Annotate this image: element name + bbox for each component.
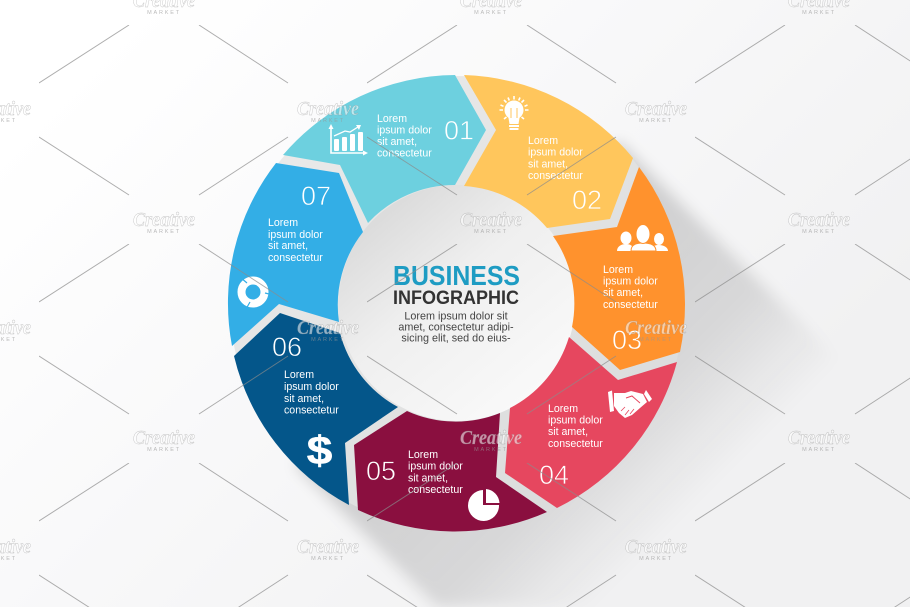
segment 02: Lorem xyxy=(528,135,558,147)
watermarks: Creative xyxy=(460,427,522,449)
watermarks: MARKET xyxy=(147,447,181,453)
segment 04: sit amet, xyxy=(548,426,588,438)
segment 01: 01 xyxy=(444,116,474,146)
segment 02: sit amet, xyxy=(528,158,568,170)
watermarks: MARKET xyxy=(147,229,181,235)
watermarks: MARKET xyxy=(474,229,508,235)
segment 02: 02 xyxy=(572,185,602,215)
icon: bar chart xyxy=(328,124,368,156)
watermarks: Creative xyxy=(297,536,359,558)
center description: sicing elit, sed do eius- xyxy=(401,332,511,344)
center description: amet, consectetur adipi- xyxy=(398,322,514,334)
watermarks: Creative xyxy=(788,427,850,449)
segment 01: ipsum dolor xyxy=(377,124,432,136)
watermarks: Creative xyxy=(297,317,359,339)
watermarks: MARKET xyxy=(639,118,673,124)
icon: dollar sign: $ xyxy=(307,429,332,473)
segment 07: ipsum dolor xyxy=(268,229,323,241)
segment 02: consectetur xyxy=(528,170,583,182)
segment 07 xyxy=(228,163,363,346)
segment 06: Lorem xyxy=(284,369,314,381)
segment 05: Lorem xyxy=(408,449,438,461)
watermarks: Creative xyxy=(625,98,687,120)
watermarks: Creative xyxy=(133,427,195,449)
backing ring behind the segments xyxy=(230,76,684,530)
center disc xyxy=(339,185,575,421)
segment 03: sit amet, xyxy=(603,287,643,299)
watermarks: MARKET xyxy=(474,10,508,16)
watermarks: MARKET xyxy=(311,556,345,562)
icon: three people xyxy=(617,224,668,251)
watermarks: MARKET xyxy=(311,118,345,124)
watermarks: Creative xyxy=(625,317,687,339)
segment 03: 03 xyxy=(612,325,642,355)
watermarks: MARKET xyxy=(639,556,673,562)
segment 06 xyxy=(234,313,398,505)
icon: pie chart xyxy=(468,489,500,521)
segment 04: consectetur xyxy=(548,438,603,450)
heading: business: BUSINESS xyxy=(393,260,520,291)
segment 04: ipsum dolor xyxy=(548,414,603,426)
segment 06: consectetur xyxy=(284,404,339,416)
segment 05: sit amet, xyxy=(408,472,448,484)
watermarks: MARKET xyxy=(802,447,836,453)
segment 07: 07 xyxy=(301,181,331,211)
segment 04: 04 xyxy=(539,460,569,490)
segment 01: sit amet, xyxy=(377,136,417,148)
watermarks: Creative xyxy=(133,209,195,231)
watermarks: MARKET xyxy=(147,10,181,16)
icon: handshake xyxy=(608,390,652,418)
segment 03: Lorem xyxy=(603,264,633,276)
long shadow of the ring xyxy=(295,141,839,607)
heading: infographic: INFOGRAPHIC xyxy=(393,287,519,309)
segment 01 xyxy=(283,75,486,223)
segment 06: ipsum dolor xyxy=(284,381,339,393)
segment 07: sit amet, xyxy=(268,240,308,252)
icon: light bulb xyxy=(500,96,528,130)
segment 04 xyxy=(505,337,677,508)
watermarks: Creative xyxy=(625,536,687,558)
segment 03 xyxy=(553,167,685,370)
segment 02: ipsum dolor xyxy=(528,146,583,158)
watermarks: MARKET xyxy=(802,10,836,16)
center description: Lorem ipsum dolor sit xyxy=(404,310,508,322)
watermarks: Creative xyxy=(297,98,359,120)
watermarks: MARKET xyxy=(311,337,345,343)
watermarks: Creative xyxy=(460,209,522,231)
segment 02 xyxy=(464,75,633,228)
segment 01: consectetur xyxy=(377,148,432,160)
center title xyxy=(393,260,520,344)
segment 05: consectetur xyxy=(408,484,463,496)
segment 07: Lorem xyxy=(268,217,298,229)
watermarks: MARKET xyxy=(802,229,836,235)
segment 04: Lorem xyxy=(548,403,578,415)
segment 07: consectetur xyxy=(268,252,323,264)
circular diagram xyxy=(228,75,685,531)
segment 06: sit amet, xyxy=(284,393,324,405)
segment 05: ipsum dolor xyxy=(408,460,463,472)
icon: cycle arrows xyxy=(240,277,273,309)
watermarks: MARKET xyxy=(474,447,508,453)
segment 05: 05 xyxy=(366,456,396,486)
segment 06: 06 xyxy=(272,332,302,362)
segment 01: Lorem xyxy=(377,113,407,125)
segment 05 xyxy=(354,411,547,531)
watermarks: Creative xyxy=(788,209,850,231)
segment 03: consectetur xyxy=(603,299,658,311)
watermarks: MARKET xyxy=(639,337,673,343)
segment 03: ipsum dolor xyxy=(603,276,658,288)
